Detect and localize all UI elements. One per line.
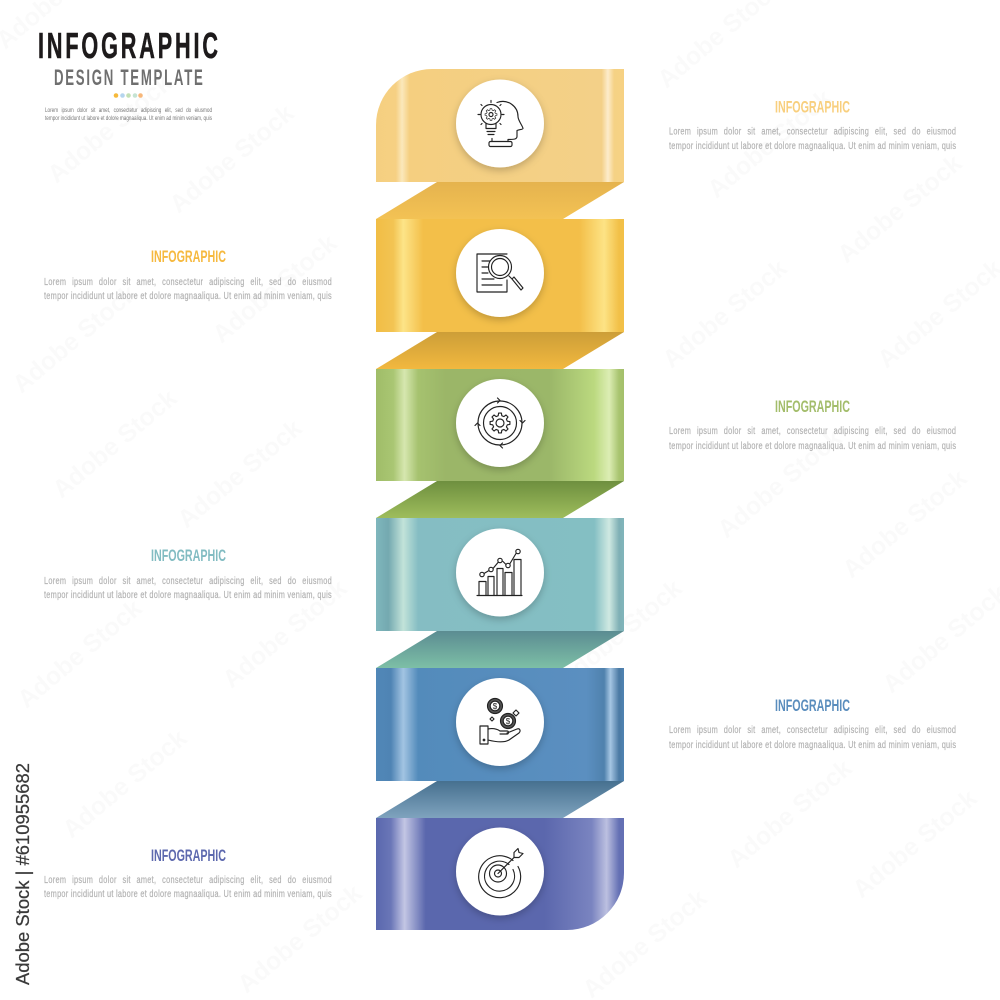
band 5: blue	[376, 668, 624, 781]
callout 3: tempor incididunt ut labore et dolore magnaaliqua. Ut enim ad minim veniam, quis	[669, 440, 956, 451]
title block	[38, 26, 218, 122]
callout 1	[669, 98, 956, 151]
intro text	[45, 107, 212, 122]
callout 1: INFOGRAPHIC	[775, 98, 850, 116]
callout 4: Lorem ipsum dolor sit amet, consectetur adipiscing elit, sed do eiusmod	[44, 575, 332, 586]
band 6: indigo	[376, 818, 624, 930]
callout 5: INFOGRAPHIC	[775, 696, 850, 715]
band 3: green	[376, 369, 624, 481]
watermarks: Adobe Stock	[702, 84, 837, 204]
callout 3: INFOGRAPHIC	[775, 397, 850, 416]
icon: head with light bulb	[478, 100, 523, 146]
band 1: yellow	[376, 69, 624, 182]
callout 5	[669, 696, 956, 750]
watermarks: Adobe Stock	[207, 229, 342, 349]
intro text: Lorem ipsum dolor sit amet, consectetur adipiscing elit, sed do eiusmod	[45, 107, 212, 114]
watermarks: Adobe Stock	[657, 254, 792, 374]
icon: bar chart with trend line	[477, 549, 522, 596]
callout 3: Lorem ipsum dolor sit amet, consectetur adipiscing elit, sed do eiusmod	[669, 425, 956, 436]
circle 4	[456, 528, 544, 616]
watermarks: Adobe Stock	[837, 464, 972, 584]
callout 4: tempor incididunt ut labore et dolore magnaaliqua. Ut enim ad minim veniam, quis	[44, 589, 332, 600]
callout 6: INFOGRAPHIC	[151, 846, 226, 865]
icon: hand with coins	[480, 698, 520, 744]
watermarks: Adobe Stock	[552, 574, 687, 694]
circle 3	[456, 379, 544, 467]
callout 3	[669, 397, 956, 451]
icon: target with arrow	[479, 848, 523, 898]
watermarks: Adobe Stock	[217, 574, 352, 694]
callout 4	[44, 546, 332, 600]
watermarks: Adobe Stock	[47, 384, 182, 504]
watermarks: Adobe Stock	[172, 414, 307, 534]
watermarks: Adobe Stock	[712, 424, 847, 544]
callout 5: Lorem ipsum dolor sit amet, consectetur adipiscing elit, sed do eiusmod	[669, 724, 956, 735]
icon: document with magnifier	[477, 254, 523, 292]
watermarks: Adobe Stock	[722, 754, 857, 874]
callout 1: tempor incididunt ut labore et dolore magnaaliqua. Ut enim ad minim veniam, quis	[669, 140, 956, 151]
callout 2: Lorem ipsum dolor sit amet, consectetur adipiscing elit, sed do eiusmod	[44, 276, 332, 287]
subtitle: DESIGN TEMPLATE	[54, 66, 203, 90]
callout 6	[44, 846, 332, 899]
intro text: tempor incididunt ut labore et dolore magnaaliqua. Ut enim ad minim veniam, quis	[45, 115, 212, 122]
icon: gear in circular arrows	[475, 398, 525, 448]
callout 2: INFOGRAPHIC	[151, 247, 226, 266]
band 2: amber	[376, 219, 624, 332]
watermarks: Adobe Stock	[847, 784, 982, 904]
watermarks: Adobe Stock	[232, 879, 367, 999]
watermarks: Adobe Stock	[57, 724, 192, 844]
stock id side label: Adobe Stock | #610955682	[12, 763, 33, 985]
callout 1: Lorem ipsum dolor sit amet, consectetur adipiscing elit, sed do eiusmod	[669, 125, 956, 137]
watermarks: Adobe Stock	[832, 149, 967, 269]
watermarks: Adobe Stock	[12, 594, 147, 714]
callout 5: tempor incididunt ut labore et dolore magnaaliqua. Ut enim ad minim veniam, quis	[669, 739, 956, 750]
callout 4: INFOGRAPHIC	[151, 546, 226, 565]
callout 2	[44, 247, 332, 301]
icon: hand with coins: $	[506, 717, 511, 726]
circle 1	[456, 80, 544, 168]
connector folds	[376, 182, 624, 818]
icon: hand with coins: $	[493, 702, 498, 711]
callout 2: tempor incididunt ut labore et dolore magnaaliqua. Ut enim ad minim veniam, quis	[44, 290, 332, 301]
callout 6: tempor incididunt ut labore et dolore magnaaliqua. Ut enim ad minim veniam, quis	[44, 888, 332, 899]
circle 2	[456, 229, 544, 317]
coloured dots	[114, 93, 143, 98]
watermarks: Adobe Stock	[42, 69, 177, 189]
circle 5	[456, 678, 544, 766]
watermarks: Adobe Stock	[7, 279, 142, 399]
title: INFOGRAPHIC	[38, 26, 218, 66]
watermarks: Adobe Stock	[164, 99, 299, 219]
circle 6	[456, 828, 544, 916]
band 4: teal	[376, 518, 624, 631]
callout 6: Lorem ipsum dolor sit amet, consectetur adipiscing elit, sed do eiusmod	[44, 874, 332, 885]
